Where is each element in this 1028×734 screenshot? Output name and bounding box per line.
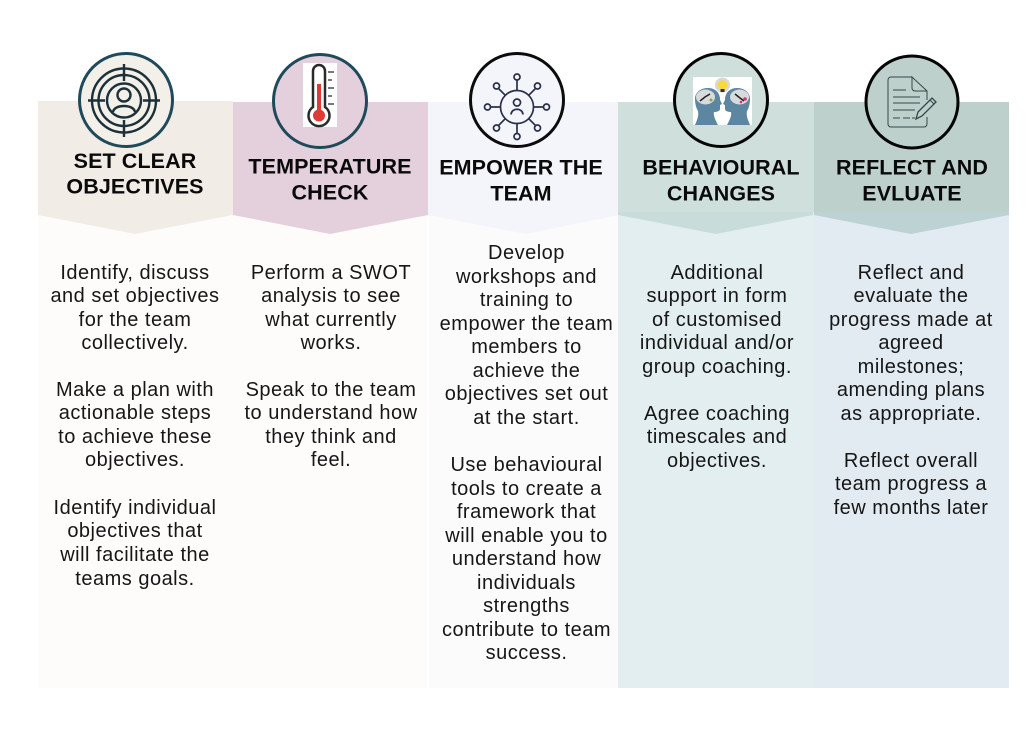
heading: reflect and evluate: EVLUATE	[862, 182, 962, 206]
text: temperature check body: to understand how	[244, 402, 418, 424]
panel: empower the team	[428, 54, 618, 688]
text: reflect and evaluate body: as appropriate.	[841, 403, 981, 425]
text: behavioural changes body: Additional	[671, 262, 763, 284]
text: empower the team body: strengths	[483, 595, 570, 617]
text: temperature check body: what currently	[264, 309, 397, 331]
text: reflect and evaluate body: milestones;	[858, 356, 964, 378]
heading: behavioural changes: CHANGES	[667, 182, 775, 206]
heading: temperature check: CHECK	[292, 180, 369, 204]
text: temperature check body: Perform a SWOT	[251, 262, 411, 284]
text: empower the team body: empower the team	[440, 313, 613, 335]
text: reflect and evaluate body: progress made at	[829, 309, 993, 331]
text: temperature check body: feel.	[311, 449, 351, 471]
icon: thermometer	[274, 54, 366, 148]
heading: temperature check: TEMPERATURE	[248, 154, 412, 178]
text: reflect and evaluate body: evaluate the	[854, 285, 968, 307]
panel: temperature check	[233, 54, 428, 688]
text: reflect and evaluate body: Reflect overall	[844, 450, 978, 472]
icon: two heads and light bulb	[674, 54, 768, 146]
text: behavioural changes body: Agree coaching	[644, 403, 790, 425]
text: empower the team body: individuals	[477, 572, 576, 594]
text: set clear objectives body: Identify individual	[54, 497, 216, 519]
text: temperature check body: Speak to the team	[246, 379, 416, 401]
panel: behavioural changes	[618, 54, 814, 688]
text: behavioural changes body: of customised	[652, 309, 782, 331]
heading: behavioural changes: BEHAVIOURAL	[642, 156, 800, 180]
text: empower the team body: objectives set out	[445, 383, 608, 405]
text: empower the team body: contribute to team	[442, 619, 611, 641]
panel: reflect and evaluate	[814, 56, 1009, 688]
text: set clear objectives body: actionable steps	[59, 402, 211, 424]
heading: set clear objectives: OBJECTIVES	[66, 174, 204, 198]
text: empower the team body: will enable you to	[444, 525, 608, 547]
text: reflect and evaluate body: few months later	[834, 497, 988, 519]
text: reflect and evaluate body: team progress a	[835, 473, 987, 495]
text: set clear objectives body: collectively.	[81, 332, 189, 354]
text: empower the team body: Use behavioural	[450, 454, 603, 476]
text: reflect and evaluate body: Reflect and	[858, 262, 964, 284]
text: behavioural changes body: individual and/or	[640, 332, 794, 354]
heading: reflect and evluate: REFLECT AND	[836, 156, 988, 180]
heading: set clear objectives: SET CLEAR	[74, 149, 197, 173]
text: empower the team body: members to	[471, 336, 582, 358]
text: reflect and evaluate body: agreed	[878, 332, 944, 354]
text: set clear objectives body: teams goals.	[75, 568, 195, 590]
panel: set clear objectives	[38, 54, 233, 688]
text: empower the team body: framework that	[457, 501, 596, 523]
text: empower the team body: understand how	[452, 548, 601, 570]
text: reflect and evaluate body: amending plans	[837, 379, 985, 401]
text: empower the team body: workshops and	[455, 266, 597, 288]
text: set clear objectives body: Identify, discuss	[60, 262, 210, 284]
text: set clear objectives body: objectives that	[67, 520, 203, 542]
text: empower the team body: tools to create a	[451, 478, 602, 500]
text: set clear objectives body: objectives.	[85, 449, 185, 471]
icon: network with person	[470, 54, 564, 146]
text: empower the team body: Develop	[488, 242, 565, 264]
text: empower the team body: achieve the	[473, 360, 580, 382]
text: empower the team body: training to	[480, 289, 573, 311]
text: behavioural changes body: support in form	[647, 285, 787, 307]
icon: document and pencil	[866, 56, 958, 148]
text: temperature check body: works.	[300, 332, 361, 354]
text: behavioural changes body: objectives.	[667, 450, 767, 472]
text: set clear objectives body: and set objectives	[50, 285, 220, 307]
icon: target with person	[80, 54, 172, 146]
heading: empower the team: EMPOWER THE	[439, 156, 603, 180]
text: set clear objectives body: for the team	[79, 309, 191, 331]
heading: empower the team: TEAM	[490, 182, 552, 206]
text: behavioural changes body: group coaching.	[642, 356, 792, 378]
text: set clear objectives body: Make a plan with	[56, 379, 214, 401]
text: behavioural changes body: timescales and	[647, 426, 787, 448]
text: temperature check body: analysis to see	[261, 285, 401, 307]
text: set clear objectives body: to achieve these	[58, 426, 212, 448]
text: temperature check body: they think and	[265, 426, 397, 448]
text: set clear objectives body: will facilitate the	[59, 544, 210, 566]
text: empower the team body: success.	[486, 642, 567, 664]
text: empower the team body: at the start.	[473, 407, 580, 429]
